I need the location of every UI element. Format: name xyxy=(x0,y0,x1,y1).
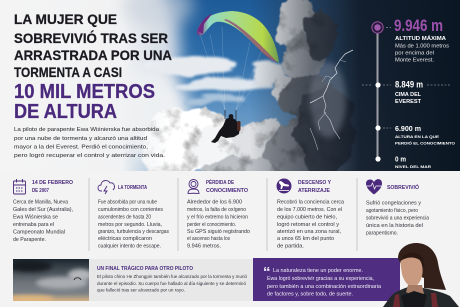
panel: survived xyxy=(366,179,429,236)
lightning glow xyxy=(310,62,346,138)
paraglider wing xyxy=(197,11,279,62)
panel: loss of consciousness xyxy=(187,178,250,250)
panel: the storm xyxy=(98,181,169,250)
label: 9.946 m: Más de 1.000 metros xyxy=(395,44,449,50)
panel: quote: de factores y, sobre todo, de suerte. xyxy=(267,292,353,298)
storm darkness xyxy=(250,0,460,171)
panel: the storm: Fue absorbida por una nube xyxy=(98,200,157,206)
panel: descent and landing: de partida. xyxy=(277,244,304,250)
panel: the storm: granizo, turbulencia y descargas xyxy=(98,229,169,235)
intro paragraph: por una nube de tormenta y alcanzó una altitud xyxy=(14,136,147,142)
lightning xyxy=(310,50,353,150)
panel: descent and landing: DESCENSO Y xyxy=(298,180,332,186)
label: 6.900 m: ALTURA EN LA QUE xyxy=(395,134,439,139)
panel: loss of consciousness: Su GPS siguió registrando xyxy=(187,229,250,235)
panel: loss of consciousness: PÉRDIDA DE xyxy=(206,178,234,186)
label: 8.849 m: 8.849 m xyxy=(395,80,423,90)
altitude timeline xyxy=(362,16,455,169)
photo: portrait of Ewa Wiśnierska xyxy=(383,243,459,307)
label: 8.849 m: CIMA DEL xyxy=(395,92,421,98)
label: 6.900 m: 6.900 m xyxy=(395,124,421,133)
intro paragraph: pero logró recuperar el control y aterrizar con vida. xyxy=(14,153,166,159)
panel: date: Gales del Sur (Australia), xyxy=(13,207,73,213)
panel: date: DE 2007 xyxy=(32,188,49,194)
panel: descent and landing: ATERRIZAJE xyxy=(298,188,331,194)
label: 9.946 m: Monte Everest. xyxy=(395,58,434,64)
panel: descent and landing: a unos 65 km del punto xyxy=(277,236,334,242)
panel: the storm: cualquier intento de escape. xyxy=(98,244,161,250)
panel: date: Ewa Wiśnierska se xyxy=(13,214,58,220)
title xyxy=(14,11,172,123)
panel: loss of consciousness: perder el conocimiento. xyxy=(187,222,236,228)
marker: maximum altitude xyxy=(372,22,383,33)
label: 0 m: NIVEL DEL MAR xyxy=(395,164,431,169)
panel: date: Cerca de Manilla, Nueva xyxy=(13,200,68,206)
panel: loss of consciousness: CONOCIMIENTO xyxy=(206,188,248,194)
icon: head xyxy=(188,180,199,194)
panel: quote: Ewa logró sobrevivir gracias a su experiencia, xyxy=(267,276,374,282)
panel: descent and landing: aterrizó en una zona rural, xyxy=(277,229,341,235)
icon: heart with pulse xyxy=(366,179,382,194)
label: 9.946 m xyxy=(394,16,449,64)
panel: loss of consciousness: y el frío extremo la hicieron xyxy=(187,214,248,220)
label: 8.849 m: EVEREST xyxy=(395,99,421,105)
panel: date: Campeonato Mundial xyxy=(13,230,65,236)
panel: quote xyxy=(253,258,400,301)
label: 0 m xyxy=(395,156,431,169)
panel: descent and landing: de los 7.000 metros. Con el xyxy=(277,207,342,213)
hero photo: paraglider in storm xyxy=(118,0,460,171)
panel: date: 14 DE FEBRERO xyxy=(32,180,73,186)
title: LA MUJER QUE xyxy=(14,11,117,27)
panel: survived: parapentismo. xyxy=(366,230,398,236)
label: 9.946 m: por encima del xyxy=(395,50,434,56)
title: SOBREVIVIÓ TRAS SER xyxy=(14,29,168,46)
panel: survived: Sufrió congelaciones y xyxy=(366,200,421,206)
panel: descent and landing: Recobró la conciencia cerca xyxy=(277,200,344,206)
panel: loss of consciousness: Alrededor de los 6.900 xyxy=(187,200,242,206)
icon: calendar xyxy=(14,179,26,194)
icon: landing plane xyxy=(276,178,292,194)
panel: quote: La naturaleza tiene un poder enorme. xyxy=(273,268,363,274)
panel: the storm: ascendentes de hasta 20 xyxy=(98,214,151,220)
clouds: high veil and streaks xyxy=(124,0,286,166)
pilot xyxy=(211,110,240,143)
title: TORMENTA A CASI xyxy=(14,64,122,80)
panel: survived: sobrevivió a una experiencia xyxy=(366,216,429,222)
label: 0 m: 0 m xyxy=(395,156,406,164)
panel: another pilot: UN FINAL TRÁGICO PARA OTRO PILOTO xyxy=(97,265,193,272)
panel: descent and landing: equipo cubierto de hielo, xyxy=(277,214,337,220)
panel: the storm: LA TORMENTA xyxy=(118,185,147,191)
panel: another pilot: durante el episodio. Su cuerpo fue hallado al día siguiente y se determinó xyxy=(97,281,246,286)
panel: date xyxy=(13,179,73,243)
panel: another pilot: que falleció tras ser alcanzado por un rayo. xyxy=(97,288,185,292)
intro paragraph: La piloto de parapente Ewa Wiśnierska fue absorbida xyxy=(14,127,160,133)
lines of paraglider xyxy=(200,26,276,110)
panel: loss of consciousness: el ascenso hasta los xyxy=(187,236,230,242)
panel: descent and landing: logró retomar el control y xyxy=(277,222,339,228)
intro paragraph: mayor a la del Everest. Perdió el conocimiento, xyxy=(14,144,149,150)
clouds: cumulus mass xyxy=(142,0,356,171)
panel: survived: única en la historia del xyxy=(366,223,423,229)
icon: storm cloud xyxy=(98,181,114,194)
panel: loss of consciousness: 9.946 metros. xyxy=(187,244,221,250)
label: 6.900 m xyxy=(395,124,455,146)
panel: descent and landing xyxy=(276,178,344,250)
label: 6.900 m: PERDIÓ EL CONOCIMIENTO xyxy=(395,140,455,146)
label: 9.946 m: ALTITUD MÁXIMA xyxy=(395,35,446,42)
label: 8.849 m xyxy=(395,80,423,105)
title: ARRASTRADA POR UNA xyxy=(14,47,172,63)
panel: the storm: eléctricas complicaron xyxy=(98,236,152,242)
panel: date: entrenaba para el xyxy=(13,222,54,228)
panel: survived: agotamiento físico, pero xyxy=(366,208,418,214)
title: DE ALTURA xyxy=(14,100,117,123)
panel: another pilot: El piloto chino He Zhongpin también fue alcanzado por la tormenta y murió xyxy=(97,274,247,279)
photo: storm clouds with glider xyxy=(13,259,89,301)
panel: the storm: metros por segundo. Lluvia, xyxy=(98,222,162,228)
label: 9.946 m: 9.946 m xyxy=(394,16,443,35)
panel: quote: pero también a una combinación extraordinaria xyxy=(267,284,381,290)
panel: date: de Parapente. xyxy=(13,237,46,243)
intro paragraph xyxy=(14,127,166,159)
panel: the storm: cumulonimbo con corrientes xyxy=(98,207,163,213)
panel: loss of consciousness: metros, la falta de oxígeno xyxy=(187,207,246,213)
title: 10 MIL METROS xyxy=(14,80,155,103)
icon: quotation mark: “ xyxy=(263,264,270,281)
panel: survived: SOBREVIVIÓ xyxy=(387,183,419,191)
panel: another pilot xyxy=(89,259,254,301)
